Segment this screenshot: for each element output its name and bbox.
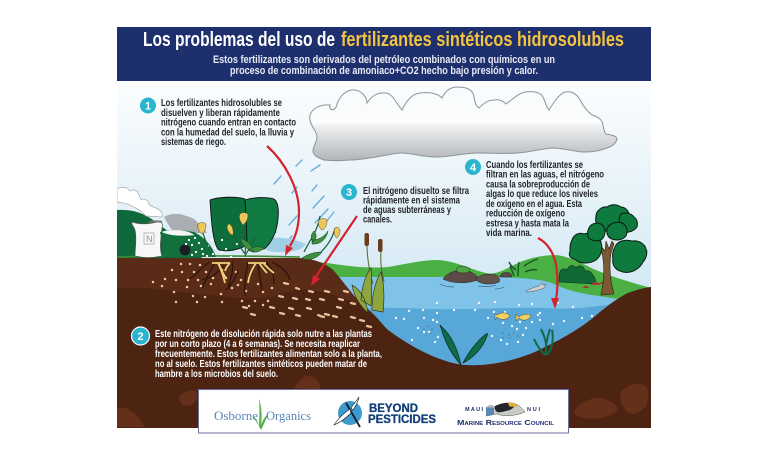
green cylinder leaf left: [210, 197, 247, 251]
deep water: [368, 304, 610, 366]
step 4 text: causa la sobreproducción de: [486, 179, 590, 190]
step 4 text: [486, 160, 604, 239]
title: [143, 29, 624, 51]
step 4 text: estresa y hasta mata la: [486, 218, 569, 229]
water: [339, 277, 618, 310]
tree trunk: [600, 240, 614, 296]
pale water patch by plant: [264, 238, 306, 252]
cloud: [310, 87, 617, 161]
step 1 text: [161, 98, 296, 148]
white fertilizer heap: [162, 230, 194, 236]
fertilizer spreader mound: [160, 230, 216, 257]
white fertilizer dots on plants: [186, 238, 237, 257]
pond rocks: [443, 266, 512, 284]
soil stones: [117, 376, 648, 427]
step 4 text: reducción de oxígeno: [486, 209, 565, 220]
step 1 text: disuelven y liberan rápidamente: [161, 108, 280, 119]
green ground strip: [117, 256, 300, 257]
infographic scene: [117, 81, 651, 428]
lower soil layer: [117, 287, 651, 428]
background hill dark green: [117, 210, 202, 258]
bag letter N: N: [146, 234, 152, 244]
step 4 text: Cuando los fertilizantes se: [486, 160, 583, 171]
arrow 3: [311, 216, 357, 286]
cattails: [352, 233, 384, 313]
arrow 1: [267, 146, 299, 256]
step 1 text: Los fertilizantes hidrosolubles se: [161, 98, 282, 109]
far green hills behind pond: [320, 255, 649, 299]
step 3 badge: 3: [346, 187, 352, 199]
header banner: [117, 27, 651, 81]
subtitle: [213, 54, 555, 77]
subtitle: proceso de combinación de amoniaco+CO2 hecho bajo presión y calor.: [230, 65, 538, 77]
rain streaks: [273, 159, 335, 239]
step 2 text: Este nitrógeno de disolución rápida solo nutre a las plantas: [155, 329, 372, 340]
water plant left: [440, 325, 488, 365]
logo: Beyond Pesticides: [334, 397, 436, 427]
water plant right: [534, 329, 553, 355]
step 1 text: con la humedad del suelo, la lluvia y: [161, 127, 294, 138]
logo: Osborne Organics: Organics: [266, 408, 311, 423]
arrow 4: [538, 238, 559, 309]
step 1 badge: 1: [145, 100, 151, 112]
tree: [569, 205, 647, 295]
step 2 text: no al suelo. Estos fertilizantes sintéticos pueden matar de: [155, 359, 367, 370]
black wheel: [180, 244, 190, 256]
algae specks: [424, 326, 518, 338]
logo: Osborne Organics: [214, 399, 311, 430]
mushrooms: [583, 282, 603, 288]
step 3 badge: [341, 184, 357, 200]
grey smoke: [164, 214, 207, 233]
title: Los problemas del uso de: [143, 29, 335, 51]
step 4 text: de oxígeno en el agua. Esta: [486, 199, 582, 210]
step 1 text: sistemas de riego.: [161, 137, 226, 148]
step 2 badge: [132, 327, 150, 345]
logo: Maui Nui Marine Resource Council: NUI: [527, 407, 540, 413]
smoke: [117, 187, 162, 217]
fish yellow: [495, 313, 531, 321]
step 3 text: canales.: [363, 214, 392, 226]
sky background: [117, 104, 651, 288]
logo: Maui Nui Marine Resource Council: [457, 403, 554, 427]
step 2 text: [155, 329, 382, 380]
step 3 text: de aguas subterráneas y: [363, 205, 451, 216]
green cylinder leaf right: [245, 198, 278, 250]
step 2 text: hambre a los microbios del suelo.: [155, 369, 278, 380]
plant roots: [190, 262, 290, 296]
step 2 text: frecuentemente. Estos fertilizantes alimentan solo a la planta,: [155, 349, 382, 360]
logo: Maui Nui Marine Resource Council: Marine Resource Council: [457, 418, 554, 427]
step 2 text: por un corto plazo (4 a 6 semanas). Se necesita reaplicar: [155, 339, 360, 350]
step 4 text: filtran en las aguas, el nitrógeno: [486, 170, 604, 181]
step 3 text: rápidamente en el sistema: [363, 196, 460, 206]
logo: Maui Nui Marine Resource Council: MAUI: [465, 407, 483, 413]
soil nitrogen dots: [153, 264, 272, 306]
step 4 badge: [465, 159, 481, 175]
step 4 text: vida marina.: [486, 228, 532, 239]
dead fish: [526, 283, 546, 292]
fertilizer bag: [132, 220, 162, 258]
bushes: [559, 266, 596, 284]
step 3 text: [363, 186, 469, 226]
logo: Beyond Pesticides: PESTICIDES: [368, 414, 436, 426]
surface ripples: [440, 284, 504, 289]
tree canopy: [569, 205, 647, 272]
soil: [117, 258, 651, 366]
step 1 text: nitrógeno cuando entran en contacto: [161, 118, 296, 129]
shore reeds: [509, 259, 538, 276]
flowers and stems: [198, 213, 340, 260]
logo: Beyond Pesticides: BEYOND: [369, 403, 418, 415]
soil nitrogen pellets: [243, 283, 371, 327]
step 1 badge: [140, 98, 156, 114]
subtitle: Estos fertilizantes son derivados del petróleo combinados con químicos en un: [213, 54, 555, 66]
logo: Osborne Organics: Osborne: [214, 408, 258, 423]
title: fertilizantes sintéticos hidrosolubles: [341, 29, 624, 51]
logo strip: [198, 390, 568, 433]
step 3 text: El nitrógeno disuelto se filtra: [363, 186, 469, 197]
step 2 badge: 2: [137, 331, 144, 343]
step 4 text: algas lo que reduce los niveles: [486, 189, 598, 200]
step 4 badge: 4: [470, 162, 477, 174]
water dots: [396, 302, 599, 344]
